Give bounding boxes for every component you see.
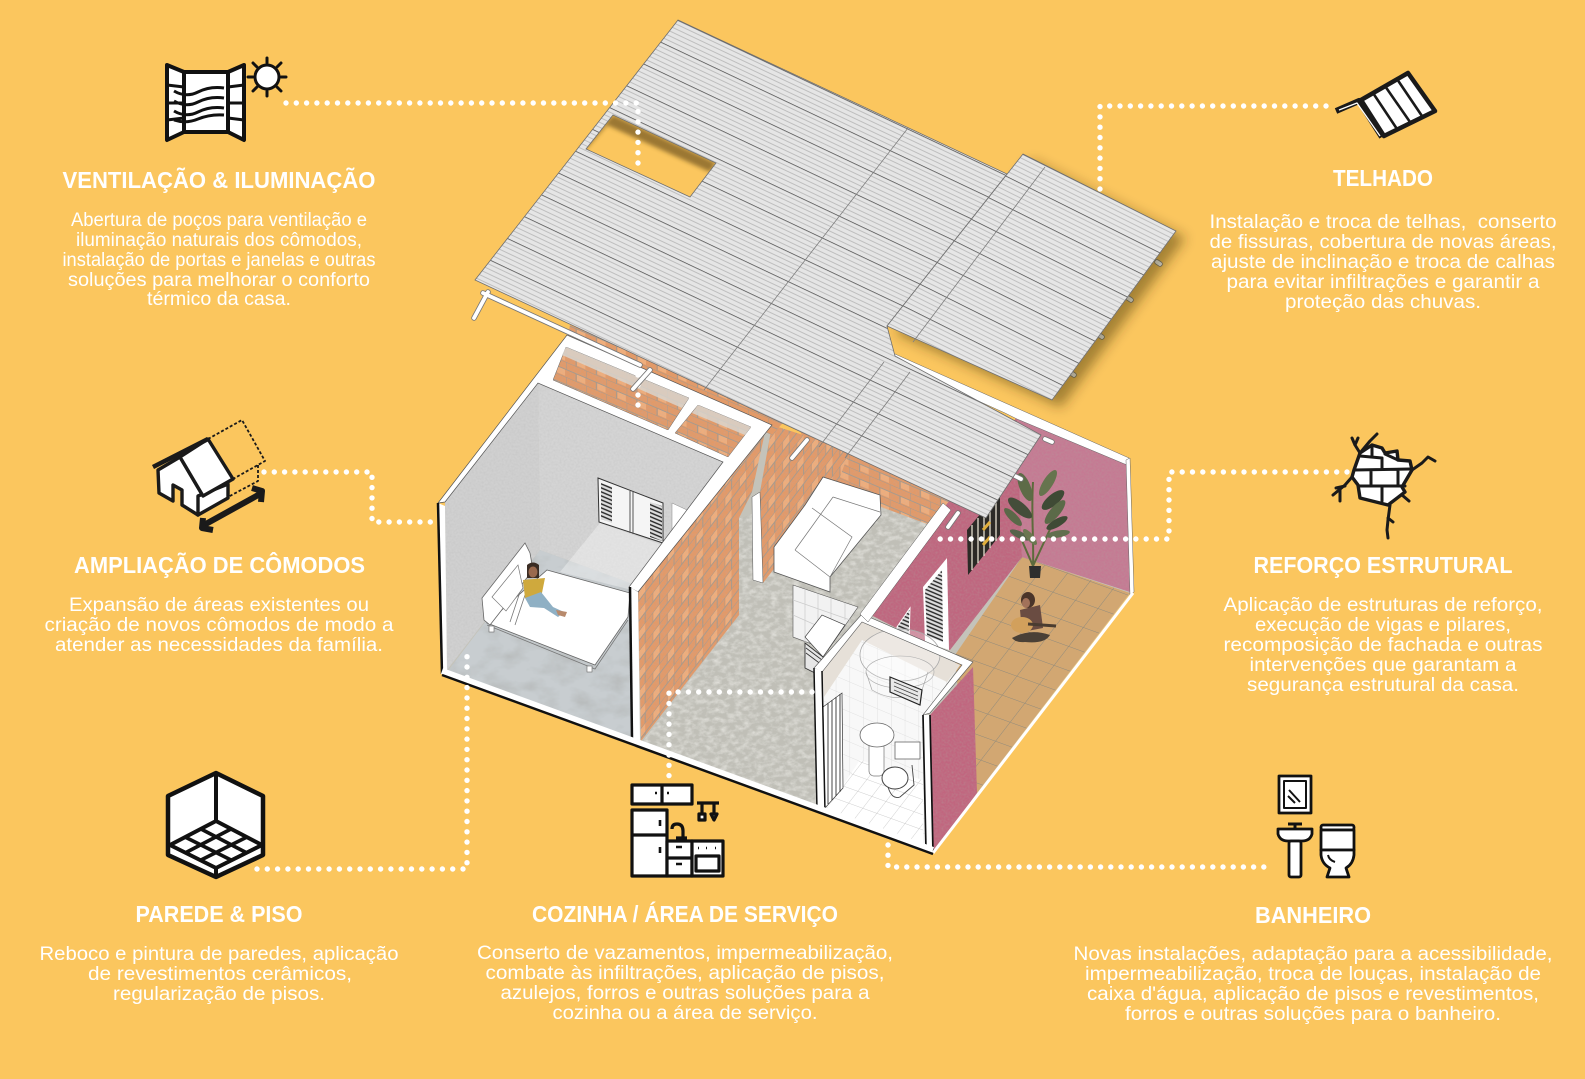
text block — [44, 595, 394, 656]
text block: Conserto de vazamentos, impermeabilização, — [477, 943, 893, 964]
back brick wall — [790, 415, 950, 525]
text block: combate às infiltrações, aplicação de pisos, — [486, 963, 884, 984]
heading: BANHEIRO — [1255, 902, 1371, 928]
text block: Expansão de áreas existentes ou — [69, 595, 369, 616]
heading: COZINHA / ÁREA DE SERVIÇO — [532, 900, 838, 927]
icon: roof — [1336, 73, 1435, 137]
text block — [1210, 212, 1556, 313]
text block: de fissuras, cobertura de novas áreas, — [1210, 232, 1556, 253]
icon: mirror, sink and toilet — [1278, 776, 1354, 877]
house: exploded isometric model without roof — [438, 325, 1134, 854]
connector: cozinha — [669, 692, 812, 777]
heading: AMPLIAÇÃO DE CÔMODOS — [74, 551, 365, 578]
secondary roof panel — [887, 154, 1176, 400]
pink terrace side wall — [867, 417, 1022, 650]
text block: forros e outras soluções para o banheiro. — [1125, 1004, 1501, 1025]
heading: REFORÇO ESTRUTURAL — [1254, 552, 1512, 578]
text block: impermeabilização, troca de louças, instalação de — [1085, 964, 1541, 985]
text block: caixa d'água, aplicação de pisos e revestimentos, — [1087, 984, 1539, 1005]
text block: iluminação naturais dos cômodos, — [76, 230, 362, 251]
skylight inner shadow — [580, 115, 716, 172]
heading: VENTILAÇÃO & ILUMINAÇÃO — [62, 166, 376, 193]
roof rafter pipes — [474, 262, 1160, 527]
text block: Instalação e troca de telhas, conserto — [1210, 212, 1556, 233]
text block: proteção das chuvas. — [1285, 292, 1481, 313]
partition wall above kitchen — [860, 503, 951, 622]
text block: para evitar infiltrações e garantir a — [1226, 272, 1540, 293]
icon: kitchen — [632, 785, 723, 876]
terrace tiled floor — [955, 557, 1130, 793]
bedroom window — [598, 478, 663, 543]
bed — [482, 543, 630, 672]
icon: house expansion — [153, 420, 265, 530]
back brick wall strip at top — [566, 325, 790, 435]
text block: azulejos, forros e outras soluções para a — [500, 983, 870, 1004]
text block: ajuste de inclinação e troca de calhas — [1211, 252, 1555, 273]
icon: cracked brick wall — [1333, 434, 1435, 538]
connector: telhado — [1100, 106, 1326, 190]
door jamb — [752, 492, 763, 583]
connector: reforço — [935, 472, 1347, 539]
upper niche 2 with bricks — [675, 405, 751, 457]
connector: ampliação — [264, 472, 437, 522]
pink exterior bathroom wall — [930, 667, 977, 853]
text block: instalação de portas e janelas e outras — [62, 250, 376, 271]
panel: reforço estrutural — [1224, 434, 1542, 696]
text block — [1224, 595, 1542, 696]
small white door detail — [672, 503, 687, 530]
text block: Reboco e pintura de paredes, aplicação — [40, 944, 398, 965]
kitchen tiled panel and stove — [793, 585, 858, 677]
connector: banheiro — [888, 845, 1265, 867]
top of back wall — [892, 354, 1129, 465]
white top of bedroom walls — [438, 335, 772, 592]
panel: telhado — [1210, 73, 1556, 313]
panel: banheiro — [1074, 776, 1552, 1025]
text block: Aplicação de estruturas de reforço, — [1224, 595, 1542, 616]
text block: de revestimentos cerâmicos, — [88, 964, 352, 985]
heading: TELHADO — [1333, 165, 1433, 191]
text block — [40, 944, 398, 1005]
terrace door with louvers — [923, 558, 949, 650]
heading: PAREDE & PISO — [136, 901, 302, 927]
text block: execução de vigas e pilares, — [1255, 615, 1511, 636]
bedroom back concrete wall — [538, 383, 723, 584]
text block: criação de novos cômodos de modo a — [44, 615, 394, 636]
text block — [477, 943, 893, 1024]
bathroom interior — [822, 622, 960, 850]
front base edge — [442, 671, 933, 854]
panel: cozinha e área de serviço — [477, 785, 893, 1024]
panel: ampliação de cômodos — [44, 420, 394, 656]
text block: soluções para melhorar o conforto — [68, 270, 370, 291]
text block — [1074, 944, 1552, 1025]
text block: regularização de pisos. — [113, 984, 325, 1005]
text block: atender as necessidades da família. — [55, 635, 383, 656]
text block: recomposição de fachada e outras — [1224, 635, 1542, 656]
white sofa — [774, 477, 881, 592]
text block — [62, 210, 376, 310]
terrace base edge — [933, 593, 1133, 853]
partition wall end cap — [630, 587, 640, 740]
seated person with guitar — [1011, 592, 1056, 642]
text block: Novas instalações, adaptação para a acessibilidade, — [1074, 944, 1552, 965]
terrace barred window — [967, 490, 1000, 575]
text block: segurança estrutural da casa. — [1247, 675, 1519, 696]
living room floor — [640, 485, 932, 812]
connector: parede — [257, 655, 467, 869]
panel: ventilação e iluminação — [62, 58, 376, 310]
text block: cozinha ou a área de serviço. — [552, 1003, 818, 1024]
woman sitting on bed — [523, 562, 567, 617]
potted plant — [1002, 468, 1070, 578]
bedroom floor — [447, 550, 633, 742]
text block: térmico da casa. — [147, 289, 291, 310]
text block: intervenções que garantam a — [1250, 655, 1517, 676]
connector: ventilação over roof — [286, 103, 638, 172]
small side window — [897, 608, 910, 640]
upper niche 1 with bricks — [553, 347, 689, 430]
bathroom front wall cap left — [814, 668, 825, 812]
icon: room corner with tiled floor — [168, 773, 263, 877]
bathroom front wall cap right — [923, 715, 933, 853]
house base backing — [442, 335, 1131, 851]
brick wall right of the door — [760, 425, 850, 583]
connector: ventilação below roof — [635, 365, 641, 415]
pink terrace back wall — [1017, 417, 1130, 592]
right wall end cap — [1126, 458, 1134, 595]
main roof with skylight opening — [475, 20, 1041, 518]
left wall end cap — [438, 503, 447, 674]
icon: window and sun — [167, 58, 286, 140]
white top of bathroom walls — [814, 614, 973, 715]
brick partition wall — [638, 423, 767, 741]
bedroom left concrete wall — [445, 383, 540, 670]
window light on wall and floor — [560, 523, 662, 590]
text block: Abertura de poços para ventilação e — [71, 210, 367, 231]
panel: parede e piso — [40, 773, 398, 1005]
